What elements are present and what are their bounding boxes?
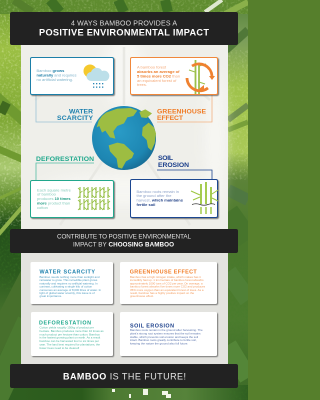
body text: hectare. Bamboo produces more than 10 times as: [40, 329, 104, 333]
connector: deforestation: [36, 163, 94, 180]
footer banner: [10, 364, 238, 388]
body text: Bamboo has a high nitrogen intake, which makes has it: [130, 275, 201, 279]
icon: grid of bamboo sprigs: [78, 187, 110, 210]
body text: fewer trees need to be cleared!: [40, 346, 80, 350]
body text: contrast, cultivating a single kilo of cotton: [40, 285, 92, 289]
header line one: 4 WAYS BAMBOO PROVIDES A: [71, 20, 177, 28]
body text: plant's strong root system ensures that the soil remains: [130, 331, 201, 335]
connector: soil erosion: [157, 170, 212, 179]
text: greenhouse card: A bamboo forest: [137, 64, 167, 70]
body text: Bamboo needs nothing more than sunlight and: [40, 275, 100, 279]
footer text: BAMBOO IS THE FUTURE!: [63, 372, 186, 382]
heading: soil erosion: SOIL: [158, 155, 173, 162]
body text: much product per hectare than cotton. Bamboo: [40, 332, 100, 336]
panel: water scarcity card: [30, 58, 114, 94]
panel: soil erosion detail: [120, 312, 217, 356]
heading: SOIL EROSION: [130, 324, 174, 330]
body text: naturally and requires no artificial watering. In: [40, 281, 98, 285]
panel: deforestation detail: [31, 312, 113, 356]
body text: great importance.: [40, 294, 62, 298]
panel: deforestation card: [30, 180, 114, 218]
panel: greenhouse effect card: [130, 58, 218, 94]
body text: Cotton yields roughly 150kg of product per: [40, 326, 94, 330]
body text: Bamboo roots remain in the ground after harvesting. The: [130, 328, 203, 332]
panel: water scarcity detail: [30, 262, 113, 304]
text: soil card: harvest, which maintains: [136, 197, 183, 202]
text: soil card: fertile soil: [136, 202, 155, 207]
body text: incredibly fast up. 1 km hectare of bamboo forest absorbs: [130, 278, 204, 282]
body text: light of global water scarcity, this issue is of: [40, 291, 95, 295]
body text: consumes an average of 8,000 litres of water. In: [40, 288, 101, 292]
header banner: [10, 12, 238, 45]
body text: intact. Bamboo roots greatly contribute to fertile soil,: [130, 338, 197, 342]
icon: bamboo with roots: [191, 182, 218, 214]
panel: greenhouse effect detail: [120, 262, 217, 304]
body text: rainwater to grow. This incredible plant grows: [40, 278, 98, 282]
text: soil card: the ground after the: [136, 193, 172, 198]
panel: soil erosion card: [130, 180, 218, 218]
section banner: [10, 229, 238, 253]
heading: water scarcity: [57, 108, 93, 122]
body text: result, bamboo has a highly positive impact on the: [130, 291, 195, 295]
icon: bamboo with cycle arrows: [187, 60, 215, 94]
text: deforestation card: produces 10 times: [37, 196, 71, 201]
body text: is the fastest growing plant on earth. As a result: [40, 336, 100, 340]
text: greenhouse card: absorbs an average of: [137, 69, 180, 74]
heading: greenhouse effect: GREENHOUSE: [157, 108, 206, 115]
body text: stable, which prevents soil erosion and keeps the soil: [130, 335, 198, 339]
section line two: IMPACT BY CHOOSING BAMBOO: [73, 242, 174, 248]
body text: greenhouse effect.: [130, 294, 154, 298]
body text: year. The land best required for plantations, the: [40, 342, 100, 346]
text: soil card: Bamboo roots remain in: [136, 189, 179, 194]
body text: bamboo forest absorbs five times more CO2 and produces: [130, 285, 206, 289]
body text: 35% more oxygen than an equivalent forest of trees. As a: [130, 288, 204, 292]
body text: keeping the nature the ground also full future.: [130, 342, 188, 346]
globe: [92, 106, 156, 170]
heading: GREENHOUSE EFFECT: [130, 270, 197, 276]
text: deforestation card: more product than: [37, 200, 70, 206]
body text: approximately 1000 tons of CO2 per year. On average, a: [130, 281, 203, 285]
heading: soil erosion: EROSION: [158, 162, 189, 169]
header line two: POSITIVE ENVIRONMENTAL IMPACT: [39, 27, 209, 37]
heading: deforestation: DEFORESTATION: [36, 156, 94, 163]
connector: water scarcity: [36, 94, 92, 122]
heading: greenhouse effect: EFFECT: [157, 115, 184, 122]
text: greenhouse card: 5 times more CO2 than: [137, 74, 180, 78]
heading: WATER SCARCITY: [40, 270, 95, 276]
text: greenhouse card: trees.: [137, 82, 147, 87]
heading: soil erosion: [158, 155, 189, 169]
heading: DEFORESTATION: [39, 321, 91, 327]
text: water card: Bamboo grows: [36, 68, 64, 73]
text: water card: naturally and requires: [36, 72, 77, 78]
text: deforestation card: cotton: [37, 205, 48, 210]
icon: sun and rain cloud: [84, 64, 109, 88]
heading: water scarcity: WATER: [69, 108, 93, 115]
heading: water scarcity: SCARCITY: [57, 115, 93, 122]
panel: white paper backing: [21, 36, 228, 364]
text: deforestation card: Each square metre: [37, 187, 72, 192]
text: deforestation card: of bamboo: [37, 192, 57, 197]
connector: greenhouse effect: [157, 94, 212, 122]
heading: greenhouse effect: [157, 108, 206, 122]
section line one: CONTRIBUTE TO POSITIVE ENVIRONMENTAL: [57, 234, 191, 240]
text: greenhouse card: an equivalent forest of: [137, 78, 177, 83]
background: bamboo forest: [0, 0, 248, 400]
body text: bamboo can be harvested four to six times per: [40, 339, 99, 343]
text: water card: no artificial watering.: [36, 77, 73, 82]
